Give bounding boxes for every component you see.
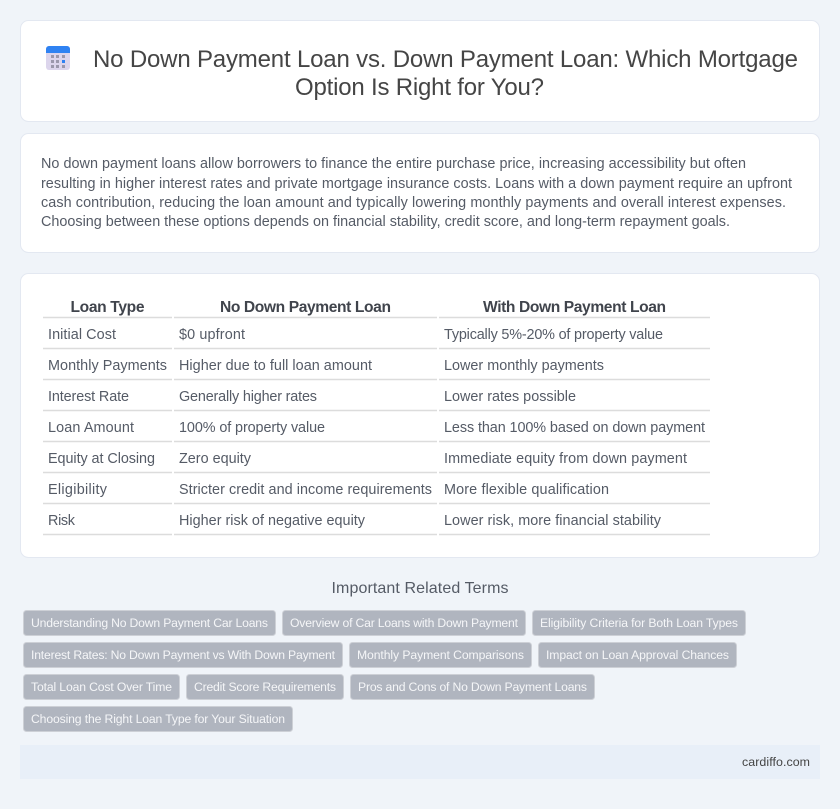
row: monthly payments: Lower monthly payments [444, 358, 604, 374]
row: monthly payments: Monthly Payments [48, 358, 167, 374]
panel: overview text: No down payment loans allow borrowers to finance the entire purchase price, increasing accessibility but often [41, 156, 746, 172]
heading [93, 46, 798, 101]
row: eligibility: Eligibility [48, 482, 108, 498]
row: monthly payments: Higher due to full loan amount [179, 358, 372, 374]
panel: comparison table [20, 274, 820, 558]
row: risk: Risk [48, 513, 76, 529]
row: initial cost: Typically 5%-20% of property value [444, 327, 663, 343]
row: interest rate: Lower rates possible [444, 389, 576, 405]
related terms tags: Total Loan Cost Over Time [31, 680, 172, 694]
panel: title [20, 20, 820, 122]
row: equity at closing: Equity at Closing [48, 451, 155, 467]
row: loan amount [48, 420, 705, 436]
row: interest rate: Generally higher rates [179, 389, 317, 405]
footer [20, 745, 820, 779]
table header: Loan Type [70, 299, 145, 316]
row: loan amount: 100% of property value [179, 420, 325, 436]
row: initial cost: $0 upfront [179, 327, 245, 343]
footer: cardiffo.com [742, 755, 810, 769]
row: eligibility: Stricter credit and income requirements [179, 482, 432, 498]
related terms tags: Understanding No Down Payment Car Loans [31, 616, 268, 630]
related terms tags: Pros and Cons of No Down Payment Loans [358, 680, 587, 694]
row: equity at closing [48, 451, 687, 467]
related terms tags: Monthly Payment Comparisons [357, 648, 524, 662]
row: initial cost [48, 327, 663, 343]
row: interest rate: Interest Rate [48, 389, 129, 405]
row: equity at closing: Zero equity [179, 451, 252, 467]
related terms tags: Choosing the Right Loan Type for Your Situation [31, 712, 285, 726]
row: risk [48, 513, 662, 529]
row: loan amount: Loan Amount [48, 420, 134, 436]
table header [70, 299, 666, 316]
related terms tags: Credit Score Requirements [194, 680, 336, 694]
row: loan amount: Less than 100% based on down payment [444, 420, 705, 436]
row: risk: Higher risk of negative equity [179, 513, 366, 529]
row: interest rate [48, 389, 576, 405]
heading: No Down Payment Loan vs. Down Payment Loan: Which Mortgage [93, 46, 798, 73]
related terms tags: Overview of Car Loans with Down Payment [290, 616, 519, 630]
related terms heading: Important Related Terms [332, 580, 508, 597]
related terms tags: Eligibility Criteria for Both Loan Types [540, 616, 738, 630]
related terms tags [24, 610, 746, 732]
icon: calendar [46, 46, 70, 70]
row: monthly payments [48, 358, 604, 374]
panel: overview text: cash contribution, reducing the loan amount and typically lowering monthly payments and overall interest expenses. [41, 195, 786, 211]
row: eligibility: More flexible qualification [444, 482, 609, 498]
related terms tags: Impact on Loan Approval Chances [546, 648, 729, 662]
panel: overview text: Choosing between these options depends on financial stability, credit score, and long-term repayment goals. [41, 214, 730, 230]
row: initial cost: Initial Cost [48, 327, 116, 343]
panel: overview text [20, 134, 820, 252]
row: eligibility [48, 482, 609, 498]
heading: Option Is Right for You? [295, 74, 544, 101]
row: equity at closing: Immediate equity from down payment [444, 451, 687, 467]
table header: No Down Payment Loan [220, 299, 391, 316]
panel: overview text: resulting in higher interest rates and private mortgage insurance costs. Loans with a down payment require an upfront [41, 176, 792, 192]
table header: With Down Payment Loan [483, 299, 666, 316]
row: risk: Lower risk, more financial stability [444, 513, 662, 529]
related terms tags: Interest Rates: No Down Payment vs With Down Payment [31, 648, 336, 662]
